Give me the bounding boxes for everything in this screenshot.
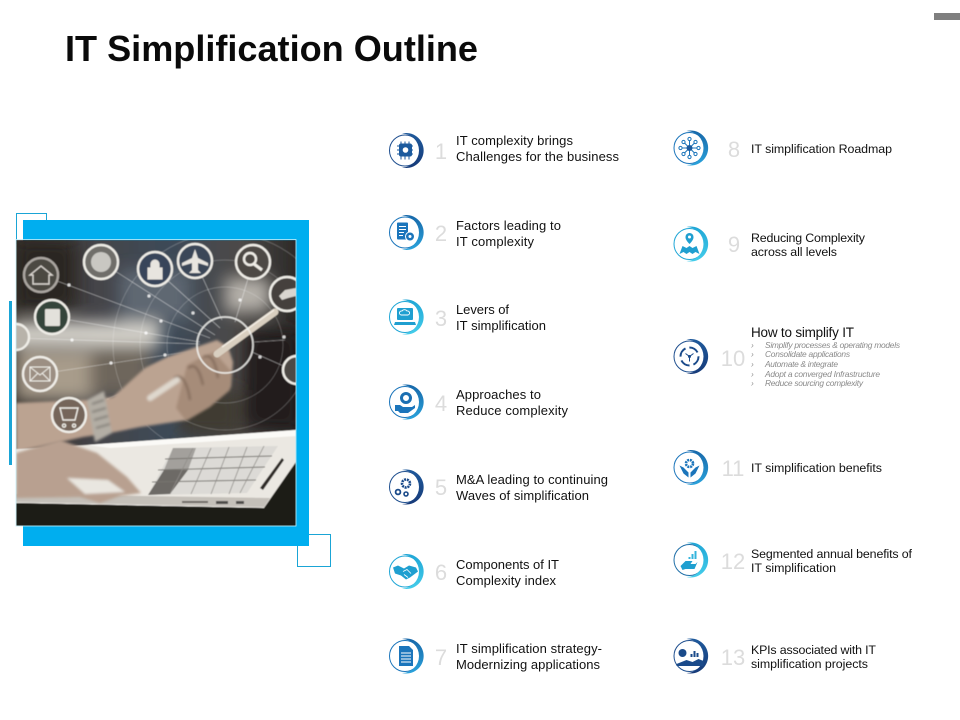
number 10: 10 xyxy=(721,346,745,371)
number 6: 6 xyxy=(435,560,447,585)
number 1: 1 xyxy=(435,139,447,164)
text 3: Levers of xyxy=(456,302,509,317)
number 13: 13 xyxy=(721,645,745,670)
number 11: 11 xyxy=(722,456,744,481)
sub-list 10: Consolidate applications xyxy=(765,349,851,359)
text 13: KPIs associated with IT xyxy=(751,643,876,657)
laptop body xyxy=(0,430,296,526)
sub-list 10: Simplify processes & operating models xyxy=(765,340,901,350)
item 2 xyxy=(390,215,561,250)
item 9: across all levels xyxy=(751,245,837,259)
text 8: IT simplification Roadmap xyxy=(751,142,892,156)
photo: hands with phone and laptop xyxy=(16,240,296,526)
item 2: IT complexity xyxy=(456,234,534,249)
item 5 xyxy=(390,470,608,504)
icon: network hub xyxy=(674,130,708,166)
item 13: simplification projects xyxy=(751,657,868,671)
blue frame xyxy=(23,220,309,546)
photo panel with blue frame xyxy=(0,214,337,566)
outline square bottom right xyxy=(298,534,330,566)
sub-list 10: › xyxy=(751,349,754,359)
number 2: 2 xyxy=(435,221,447,246)
keyboard xyxy=(148,446,278,495)
item 10 xyxy=(674,325,901,388)
sub-list 10: › xyxy=(751,378,754,388)
heading 10: How to simplify IT xyxy=(751,325,854,340)
text 11: IT simplification benefits xyxy=(751,461,882,475)
item 11 xyxy=(674,450,882,485)
text 1: IT complexity brings xyxy=(456,133,574,148)
sub-list 10: › xyxy=(751,359,754,369)
item 4 xyxy=(390,384,568,420)
text 6: Components of IT xyxy=(456,557,559,572)
number 4: 4 xyxy=(435,391,447,416)
item 4: Reduce complexity xyxy=(456,403,568,418)
sub-list 10: Reduce sourcing complexity xyxy=(765,378,864,388)
item 7 xyxy=(390,638,602,674)
floating app icons xyxy=(3,244,311,432)
sub-list 10: › xyxy=(751,369,754,379)
number 3: 3 xyxy=(435,306,447,331)
corner grey tab xyxy=(934,13,960,20)
icon: document with gear xyxy=(390,215,424,250)
item 6: Complexity index xyxy=(456,573,556,588)
icon: chip xyxy=(390,133,424,168)
text 12: Segmented annual benefits of xyxy=(751,547,913,561)
icon: cycle arrows xyxy=(674,339,708,374)
text 9: Reducing Complexity xyxy=(751,231,866,245)
number 8: 8 xyxy=(728,137,740,162)
item 1: Challenges for the business xyxy=(456,149,620,164)
title: IT Simplification Outline xyxy=(65,28,478,69)
icon: pie and charts xyxy=(674,638,708,674)
item 3: IT simplification xyxy=(456,318,546,333)
phone xyxy=(217,312,275,354)
outline square top left xyxy=(16,214,46,244)
app icon glyphs xyxy=(30,249,296,427)
item 1 xyxy=(390,133,620,168)
text 2: Factors leading to xyxy=(456,218,561,233)
text 5: M&A leading to continuing xyxy=(456,472,608,487)
icon: laptop with cloud xyxy=(390,300,424,334)
item 3 xyxy=(390,300,546,334)
icon: hand with bar chart xyxy=(674,542,708,578)
item 7: Modernizing applications xyxy=(456,657,600,672)
focus ring xyxy=(197,317,253,373)
left accent bar xyxy=(9,301,12,465)
icon: gears xyxy=(390,470,424,504)
item 13 xyxy=(674,638,876,674)
sub-list 10: › xyxy=(751,340,754,350)
text 7: IT simplification strategy- xyxy=(456,641,602,656)
sub-list 10 xyxy=(751,340,901,388)
number 9: 9 xyxy=(728,232,740,257)
item 5: Waves of simplification xyxy=(456,488,589,503)
item 8 xyxy=(674,130,892,166)
icon: hands with gear xyxy=(674,450,708,485)
sub-list 10: Automate & integrate xyxy=(764,359,838,369)
number 5: 5 xyxy=(435,475,447,500)
item 6 xyxy=(390,554,559,589)
network arcs and lines xyxy=(112,240,296,440)
icon: gear in hand xyxy=(390,384,424,420)
photo border xyxy=(16,240,296,526)
item 12 xyxy=(674,542,913,578)
icon: document xyxy=(390,638,424,674)
arm and hand holding phone xyxy=(16,340,233,452)
sub-list 10: Adopt a converged Infrastructure xyxy=(764,369,880,379)
icon: handshake xyxy=(390,554,424,589)
lower hand on trackpad xyxy=(16,440,141,503)
icon: map pin xyxy=(674,226,708,262)
number 12: 12 xyxy=(721,549,745,574)
text 4: Approaches to xyxy=(456,387,541,402)
number 7: 7 xyxy=(435,645,447,670)
item 12: IT simplification xyxy=(751,561,836,575)
item 9 xyxy=(674,226,866,262)
